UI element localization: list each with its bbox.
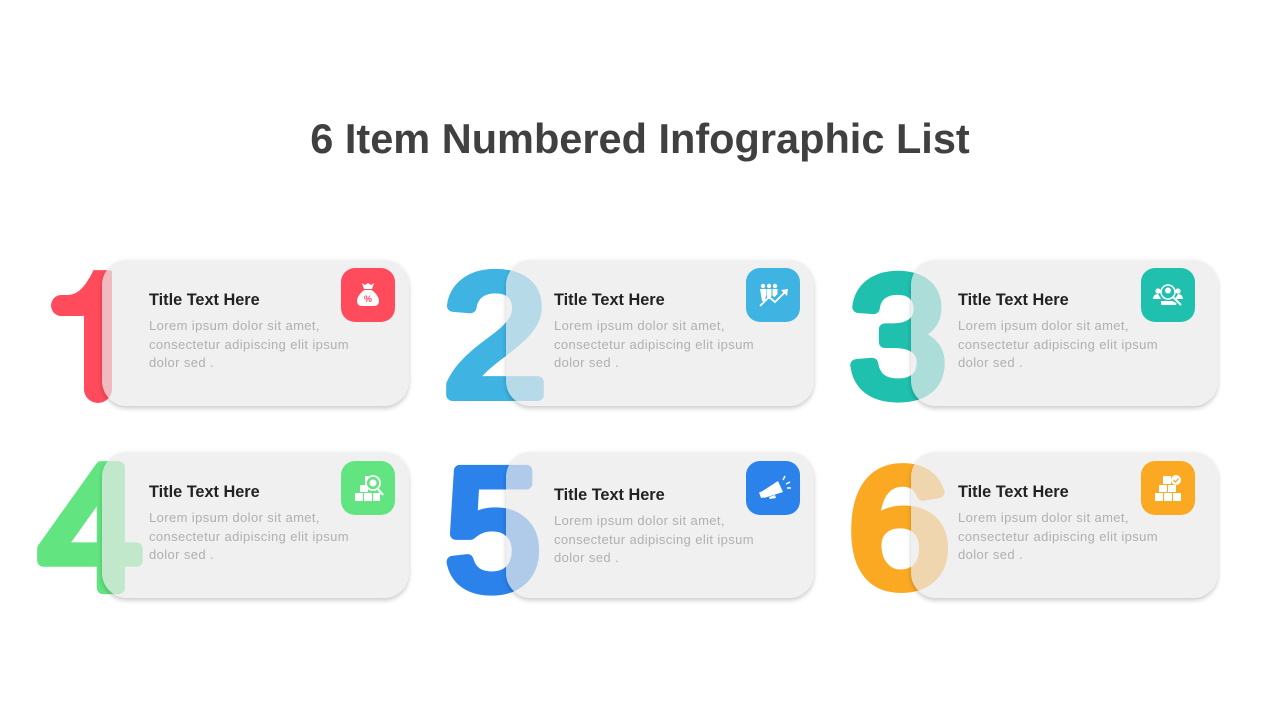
card 6 text [958,510,1158,562]
card 4 text: dolor sed . [149,547,214,562]
icon: money bag: % [364,294,372,304]
card 3 text [958,318,1158,370]
card 2 text: consectetur adipiscing elit ipsum [554,337,754,352]
icon: boxes search [341,461,395,515]
card 5 [506,452,814,598]
card 3 heading: Title Text Here [958,291,1069,309]
panel: item 3 [850,243,1220,432]
card 2 [506,260,814,406]
panel: item 6 [848,436,1220,622]
icon: money bag [341,268,395,322]
card 5 text [554,513,754,565]
panel: item 4 [37,430,411,626]
card 5 text: consectetur adipiscing elit ipsum [554,532,754,547]
card 5 heading: Title Text Here [554,486,665,504]
card 1 text: Lorem ipsum dolor sit amet, [149,318,320,333]
card 1 text [149,318,349,370]
icon: team growth [746,268,800,322]
card 4 text: consectetur adipiscing elit ipsum [149,529,349,544]
numeral 3: 3 [850,243,946,432]
icon: people search [1141,268,1195,322]
card 4 text: Lorem ipsum dolor sit amet, [149,510,320,525]
card 5 text: dolor sed . [554,550,619,565]
icon: boxes check [1141,461,1195,515]
card 4 [102,452,409,598]
numeral 5: 5 [446,435,540,625]
numeral 6: 6 [848,436,950,622]
card 5 text: Lorem ipsum dolor sit amet, [554,513,725,528]
card 6 heading: Title Text Here [958,483,1069,501]
card 6 text: Lorem ipsum dolor sit amet, [958,510,1129,525]
panel: item 2 [443,239,816,432]
card 3 text: dolor sed . [958,355,1023,370]
card 6 [911,452,1218,598]
icon: megaphone [746,461,800,515]
card 4 heading: Title Text Here [149,483,260,501]
card 3 text: consectetur adipiscing elit ipsum [958,337,1158,352]
card 6 text: consectetur adipiscing elit ipsum [958,529,1158,544]
card 2 heading: Title Text Here [554,291,665,309]
panel: item 1 [51,260,411,410]
numeral 1: 1 [41,238,151,435]
card 1 [102,260,409,406]
numeral 1 [51,270,112,403]
card 3 text: Lorem ipsum dolor sit amet, [958,318,1129,333]
card 6 text: dolor sed . [958,547,1023,562]
card 2 text: dolor sed . [554,355,619,370]
card 3 [911,260,1218,406]
card 2 text: Lorem ipsum dolor sit amet, [554,318,725,333]
card 4 text [149,510,349,562]
card 2 text [554,318,754,370]
panel: item 5 [446,435,816,625]
card 1 heading: Title Text Here [149,291,260,309]
card 1 text: dolor sed . [149,355,214,370]
card 1 text: consectetur adipiscing elit ipsum [149,337,349,352]
numeral 4: 4 [39,430,142,626]
title: 6 Item Numbered Infographic List [310,115,970,162]
numeral 2: 2 [443,239,547,432]
